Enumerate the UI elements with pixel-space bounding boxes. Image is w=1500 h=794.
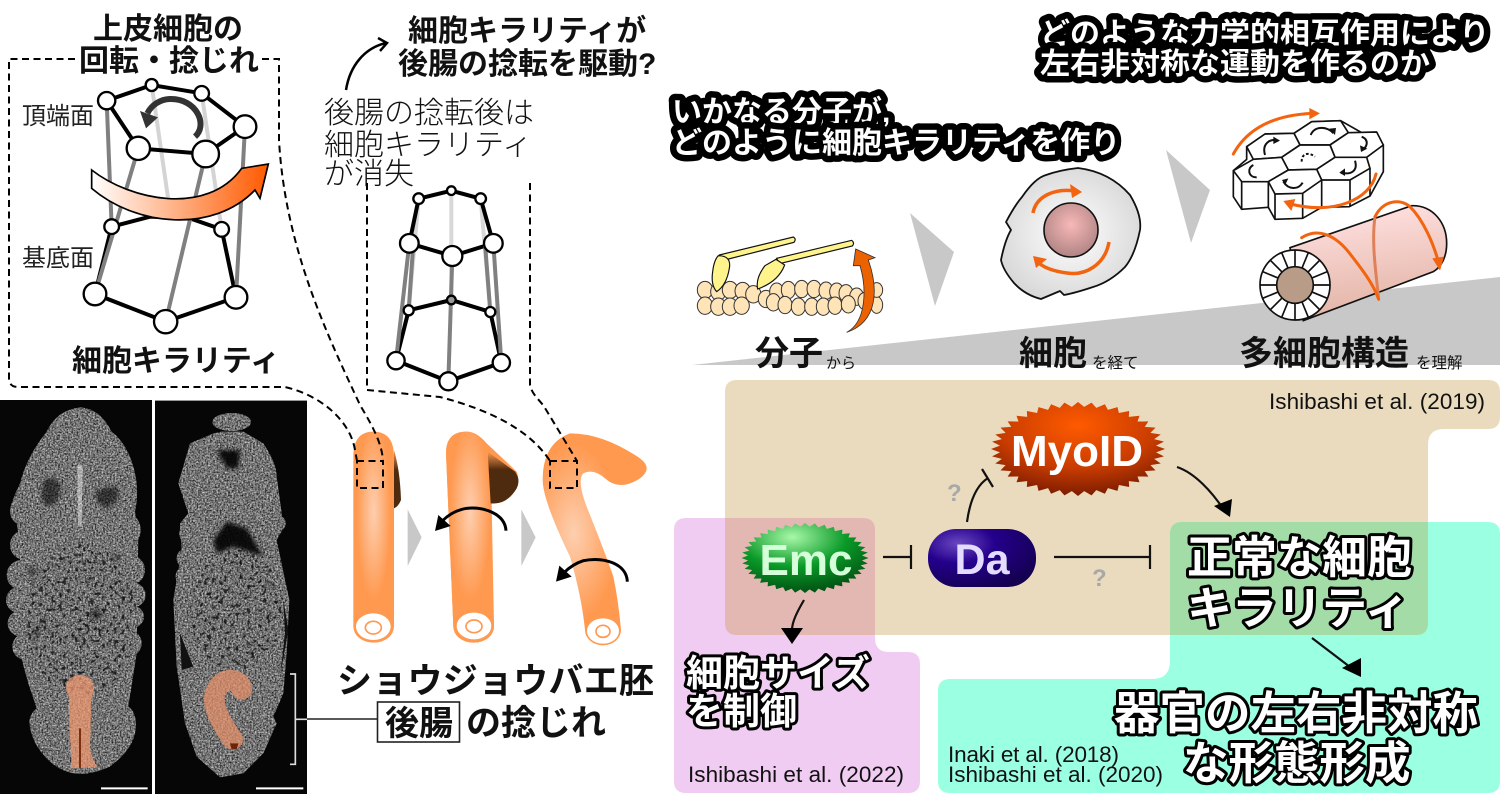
tube stage 1 — [353, 432, 401, 643]
callouts: dashed zoom lines — [9, 59, 577, 488]
diagram: hindgut twist stages — [353, 432, 647, 645]
question: which molecules: どのように細胞キラリティを作り — [672, 127, 1120, 160]
orange rotation arrows — [1233, 113, 1376, 208]
heading: does chirality drive twist: 細胞キラリティが — [408, 14, 646, 48]
citation: 2018 and 2020: Ishibashi et al. (2020) — [948, 762, 1163, 787]
panel: tan and purple overlap — [725, 518, 875, 635]
text: controls cell size: を制御 — [686, 691, 797, 732]
line: bracket to hindgut label — [307, 718, 377, 720]
diagram: non-chiral cell — [387, 186, 510, 390]
node: MyoID — [991, 402, 1165, 496]
panel: background wedge — [692, 277, 1500, 365]
question marks: ? — [1092, 565, 1107, 592]
panel: embryo micrographs — [0, 400, 307, 794]
bracket — [290, 674, 307, 764]
chevrons between scales — [910, 150, 1210, 306]
citation: 2018 and 2020 — [948, 742, 1163, 787]
heading: epithelial cell rotation: 上皮細胞の — [93, 13, 243, 46]
inhibition: Da to chirality — [1054, 545, 1150, 569]
heading: epithelial cell rotation: 回転・捻じれ — [79, 45, 259, 78]
label: multicellular structure: を理解 — [1416, 354, 1463, 372]
stage chevrons — [408, 509, 536, 566]
text: chirality lost: が消失 — [324, 158, 414, 191]
question marks: ? — [947, 480, 962, 507]
icon: hexagonal cell sheet — [1233, 108, 1383, 219]
heading: does chirality drive twist: 後腸の捻転を駆動? — [398, 48, 656, 81]
label: from molecules: から — [826, 355, 856, 372]
node: Emc: Emc — [760, 536, 852, 585]
label: from molecules: 分子 — [755, 335, 823, 373]
node: Da: Da — [955, 536, 1011, 584]
hindgut left — [66, 675, 97, 768]
citation: 2018 and 2020: Inaki et al. (2018) — [948, 742, 1119, 767]
panel: Ishibashi 2019 tan region — [725, 380, 1500, 635]
arrow: chirality to organ asymmetry — [1312, 638, 1361, 677]
arrow: to heading — [346, 38, 387, 90]
caption: fly embryo hindgut twist: の捻じれ — [466, 704, 606, 743]
icon: single cell — [1001, 168, 1140, 299]
node: Da — [928, 529, 1036, 587]
question: mechanical interactions: どのような力学的相互作用により — [1040, 18, 1489, 51]
text: controls cell size: 細胞サイズ — [686, 653, 870, 694]
citation: 2019: Ishibashi et al. (2019) — [1269, 389, 1485, 414]
text: chirality lost: 細胞キラリティ — [324, 129, 532, 162]
arrow: MyoID to chirality — [1177, 467, 1232, 517]
label: multicellular structure: 多細胞構造 — [1239, 335, 1409, 373]
caption: fly embryo hindgut twist: 後腸 — [385, 705, 453, 743]
panel: tan and teal overlap — [1170, 522, 1428, 635]
node: Emc — [742, 523, 868, 593]
caption: fly embryo hindgut twist: ショウジョウバエ胚 — [337, 662, 654, 701]
label: cell chirality: 細胞キラリティ — [72, 345, 280, 378]
hindgut right — [214, 680, 242, 749]
inhibition: Emc to Da — [883, 545, 911, 569]
label: through cells — [1019, 335, 1139, 373]
question marks — [947, 480, 1107, 592]
icon: actin and myosin — [697, 237, 883, 332]
embryo right — [173, 413, 289, 777]
inhibition: Da to MyoID — [967, 469, 993, 522]
question: which molecules: いかなる分子が, — [672, 95, 890, 129]
text: chirality lost: 後腸の捻転後は — [324, 97, 534, 130]
caption: fly embryo hindgut twist — [337, 662, 654, 743]
diagram: chiral cell — [84, 79, 268, 333]
text: organ left-right morphogenesis: 器官の左右非対称 — [1114, 688, 1478, 739]
node: MyoID: MyoID — [1011, 427, 1143, 476]
label: apical surface: 頂端面 — [22, 103, 94, 130]
tube stage 2 — [446, 432, 518, 643]
tube stage 3 — [543, 433, 647, 645]
arrow: tissue twist — [92, 164, 268, 220]
label: through cells: を経て — [1092, 354, 1139, 372]
embryo left — [6, 407, 146, 774]
question: mechanical interactions: 左右非対称な運動を作るのか — [1040, 48, 1430, 81]
label: basal surface: 基底面 — [22, 245, 94, 272]
rotation arrows — [435, 508, 627, 582]
panel: Inaki Ishibashi teal region — [938, 522, 1500, 793]
text: normal cell chirality: 正常な細胞 — [1187, 532, 1412, 583]
label: from molecules — [755, 335, 856, 373]
citation: 2022: Ishibashi et al. (2022) — [688, 762, 904, 787]
arrow: Emc to cell size — [781, 600, 804, 644]
icon: multicellular tube — [1260, 202, 1447, 321]
scale bars — [101, 785, 303, 791]
label: through cells: 細胞 — [1019, 335, 1087, 373]
text: organ left-right morphogenesis: な形態形成 — [1183, 738, 1411, 789]
text: normal cell chirality: キラリティ — [1187, 583, 1409, 634]
panel: Ishibashi 2022 purple region — [674, 518, 920, 793]
